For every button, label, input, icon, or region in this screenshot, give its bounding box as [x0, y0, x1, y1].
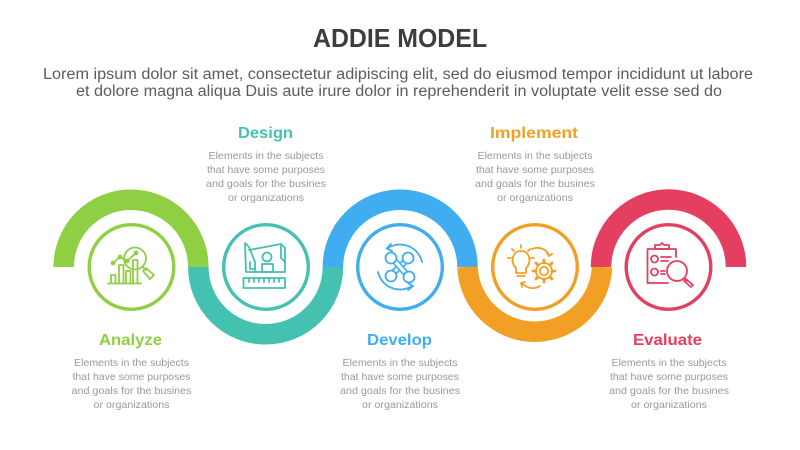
step: implement text: Elements in the subjects: [478, 151, 592, 162]
step: analyze text: and goals for the busines: [72, 386, 192, 397]
step: analyze text: Analyze: [99, 332, 162, 349]
icon: crossed tools with arrows: [378, 244, 422, 290]
circle: evaluate: [626, 225, 711, 309]
step: implement text: Implement: [490, 125, 578, 142]
subtitle paragraph: Lorem ipsum dolor sit amet, consectetur adipiscing elit, sed do eiusmod tempor incididunt ut labore: [43, 66, 753, 83]
step: evaluate text: Evaluate: [633, 332, 702, 349]
step: develop text: and goals for the busines: [340, 386, 460, 397]
step: develop text: or organizations: [362, 400, 438, 411]
step: evaluate text: [609, 332, 729, 411]
circle: implement: [493, 225, 577, 309]
circle: design: [224, 225, 308, 309]
icon: blueprint with ruler: [244, 243, 285, 288]
wave: evaluate arc: [601, 200, 736, 267]
step: develop text: Develop: [367, 332, 432, 349]
step: design text: and goals for the busines: [206, 179, 326, 190]
step: evaluate text: or organizations: [631, 400, 707, 411]
subtitle paragraph: [43, 66, 753, 100]
step: evaluate text: that have some purposes: [610, 372, 728, 383]
step: develop text: Elements in the subjects: [342, 358, 458, 369]
step: design text: or organizations: [228, 193, 304, 204]
step: evaluate text: and goals for the busines: [609, 386, 729, 397]
step: implement text: [475, 125, 595, 204]
step: develop text: [340, 332, 460, 411]
step: implement text: and goals for the busines: [475, 179, 595, 190]
circle: develop: [358, 225, 442, 309]
step: implement text: that have some purposes: [476, 165, 594, 176]
step: implement text: or organizations: [497, 193, 573, 204]
step: analyze text: Elements in the subjects: [74, 358, 189, 369]
icon: lightbulb and gear: [508, 245, 555, 288]
circle: analyze: [89, 225, 174, 309]
wave: develop arc: [333, 200, 468, 267]
wave: implement arc: [468, 267, 602, 332]
icon: checklist with magnifier: [648, 243, 693, 287]
wave: design arc: [198, 267, 333, 334]
title: ADDIE MODEL: [313, 23, 487, 53]
step: analyze text: that have some purposes: [72, 372, 190, 383]
step: develop text: that have some purposes: [341, 372, 459, 383]
step: analyze text: [72, 332, 192, 411]
step: analyze text: or organizations: [94, 400, 170, 411]
step: design text: [206, 125, 326, 204]
icon: chart with magnifier: [108, 248, 154, 284]
subtitle paragraph: et dolore magna aliqua Duis aute irure dolor in reprehenderit in voluptate velit esse sed do: [76, 83, 722, 100]
step: design text: Design: [238, 125, 293, 142]
step: design text: that have some purposes: [207, 165, 325, 176]
step: evaluate text: Elements in the subjects: [612, 358, 726, 369]
step: design text: Elements in the subjects: [208, 151, 324, 162]
wave: analyze arc: [64, 200, 198, 267]
